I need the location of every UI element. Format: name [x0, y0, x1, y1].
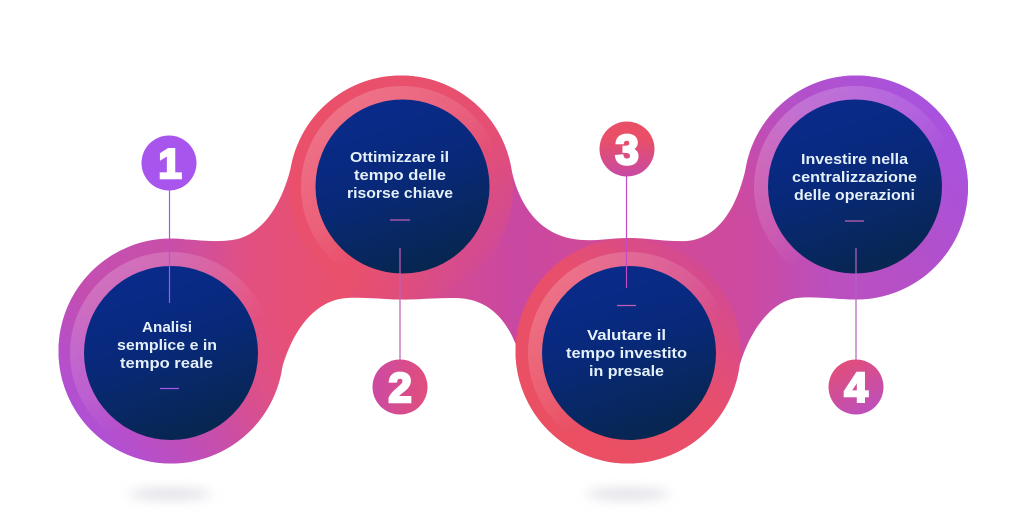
text: step 4 [792, 151, 917, 204]
text: step 2 [347, 149, 453, 202]
text: step 3 [566, 327, 687, 380]
shadow under circle 1 [128, 490, 212, 498]
text: step 1: Analisi [142, 319, 192, 336]
badge: number 1 [142, 136, 196, 190]
badge: number 2: 2 [388, 364, 412, 411]
text: step 4: delle operazioni [794, 187, 915, 204]
text: step 2: risorse chiave [347, 185, 453, 202]
badge: number 3 [600, 122, 654, 176]
panel: step 2 circle [289, 76, 513, 360]
shadow under circle 3 [586, 490, 670, 498]
text: step 2: tempo delle [354, 167, 446, 184]
text: step 1 [117, 319, 217, 372]
panel: step 3 circle [516, 176, 740, 464]
text: step 2: Ottimizzare il [350, 149, 449, 166]
badge: number 4 [828, 360, 884, 414]
badge: number 4: 4 [844, 364, 868, 411]
text: step 3: tempo investito [566, 345, 687, 362]
badge: number 2 [372, 360, 428, 414]
text: step 4: Investire nella [801, 151, 909, 168]
connected ribbon shape [58, 76, 968, 464]
text: step 3: in presale [589, 363, 664, 380]
panel: step 1 circle [58, 190, 284, 464]
text: step 4: centralizzazione [792, 169, 917, 186]
text: step 1: semplice e in [117, 337, 217, 354]
badge: number 1: 1 [158, 140, 182, 187]
text: step 1: tempo reale [120, 355, 213, 372]
panel: step 4 circle [744, 76, 968, 360]
text: step 3: Valutare il [587, 327, 666, 344]
badge: number 3: 3 [615, 126, 639, 173]
